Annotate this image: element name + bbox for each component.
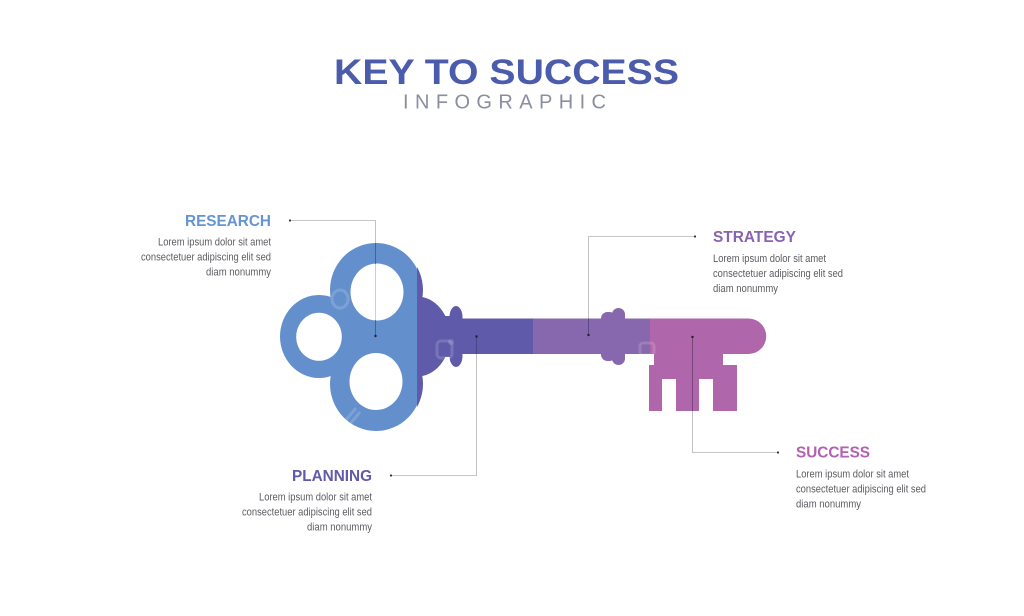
title: KEY TO SUCCESS bbox=[334, 53, 679, 92]
text block: success: Lorem ipsum dolor sit amet bbox=[796, 468, 909, 480]
watermark marks bbox=[332, 290, 654, 424]
callout: success bbox=[691, 336, 926, 510]
text block: planning bbox=[242, 492, 372, 534]
key head shadow crescent bbox=[417, 267, 462, 407]
text block: strategy: Lorem ipsum dolor sit amet bbox=[713, 253, 826, 265]
key illustration bbox=[280, 243, 766, 431]
key head holes bbox=[296, 264, 404, 410]
text block: research: Lorem ipsum dolor sit amet bbox=[158, 236, 271, 248]
leader line: strategy bbox=[587, 235, 696, 336]
text block: strategy: consectetuer adipiscing elit sed bbox=[713, 268, 843, 280]
text block: research: diam nonummy bbox=[206, 266, 271, 278]
heading: research: RESEARCH bbox=[185, 213, 271, 230]
text block: planning: diam nonummy bbox=[307, 522, 372, 534]
text block: success bbox=[796, 468, 926, 510]
callout: planning bbox=[242, 335, 478, 534]
key shaft: strategy segment bbox=[533, 308, 650, 365]
callout: research bbox=[141, 213, 377, 337]
text block: success: diam nonummy bbox=[796, 498, 861, 510]
heading: success: SUCCESS bbox=[796, 444, 870, 462]
text block: research bbox=[141, 236, 271, 278]
callout: strategy bbox=[587, 229, 843, 336]
key shaft: planning segment bbox=[460, 318, 533, 354]
heading: strategy: STRATEGY bbox=[713, 229, 796, 246]
leader line: success bbox=[691, 336, 779, 454]
text block: strategy: diam nonummy bbox=[713, 283, 778, 295]
text block: research: consectetuer adipiscing elit sed bbox=[141, 252, 271, 264]
leader line: research bbox=[289, 219, 377, 337]
text block: strategy bbox=[713, 253, 843, 295]
key bit: success segment bbox=[649, 318, 766, 411]
heading: planning: PLANNING bbox=[292, 468, 372, 485]
leader line: planning bbox=[390, 335, 478, 477]
text block: planning: consectetuer adipiscing elit sed bbox=[242, 506, 372, 518]
key head: research segment bbox=[280, 243, 425, 431]
text block: planning: Lorem ipsum dolor sit amet bbox=[259, 492, 372, 504]
text block: success: consectetuer adipiscing elit sed bbox=[796, 484, 926, 496]
subtitle: INFOGRAPHIC bbox=[403, 92, 606, 114]
